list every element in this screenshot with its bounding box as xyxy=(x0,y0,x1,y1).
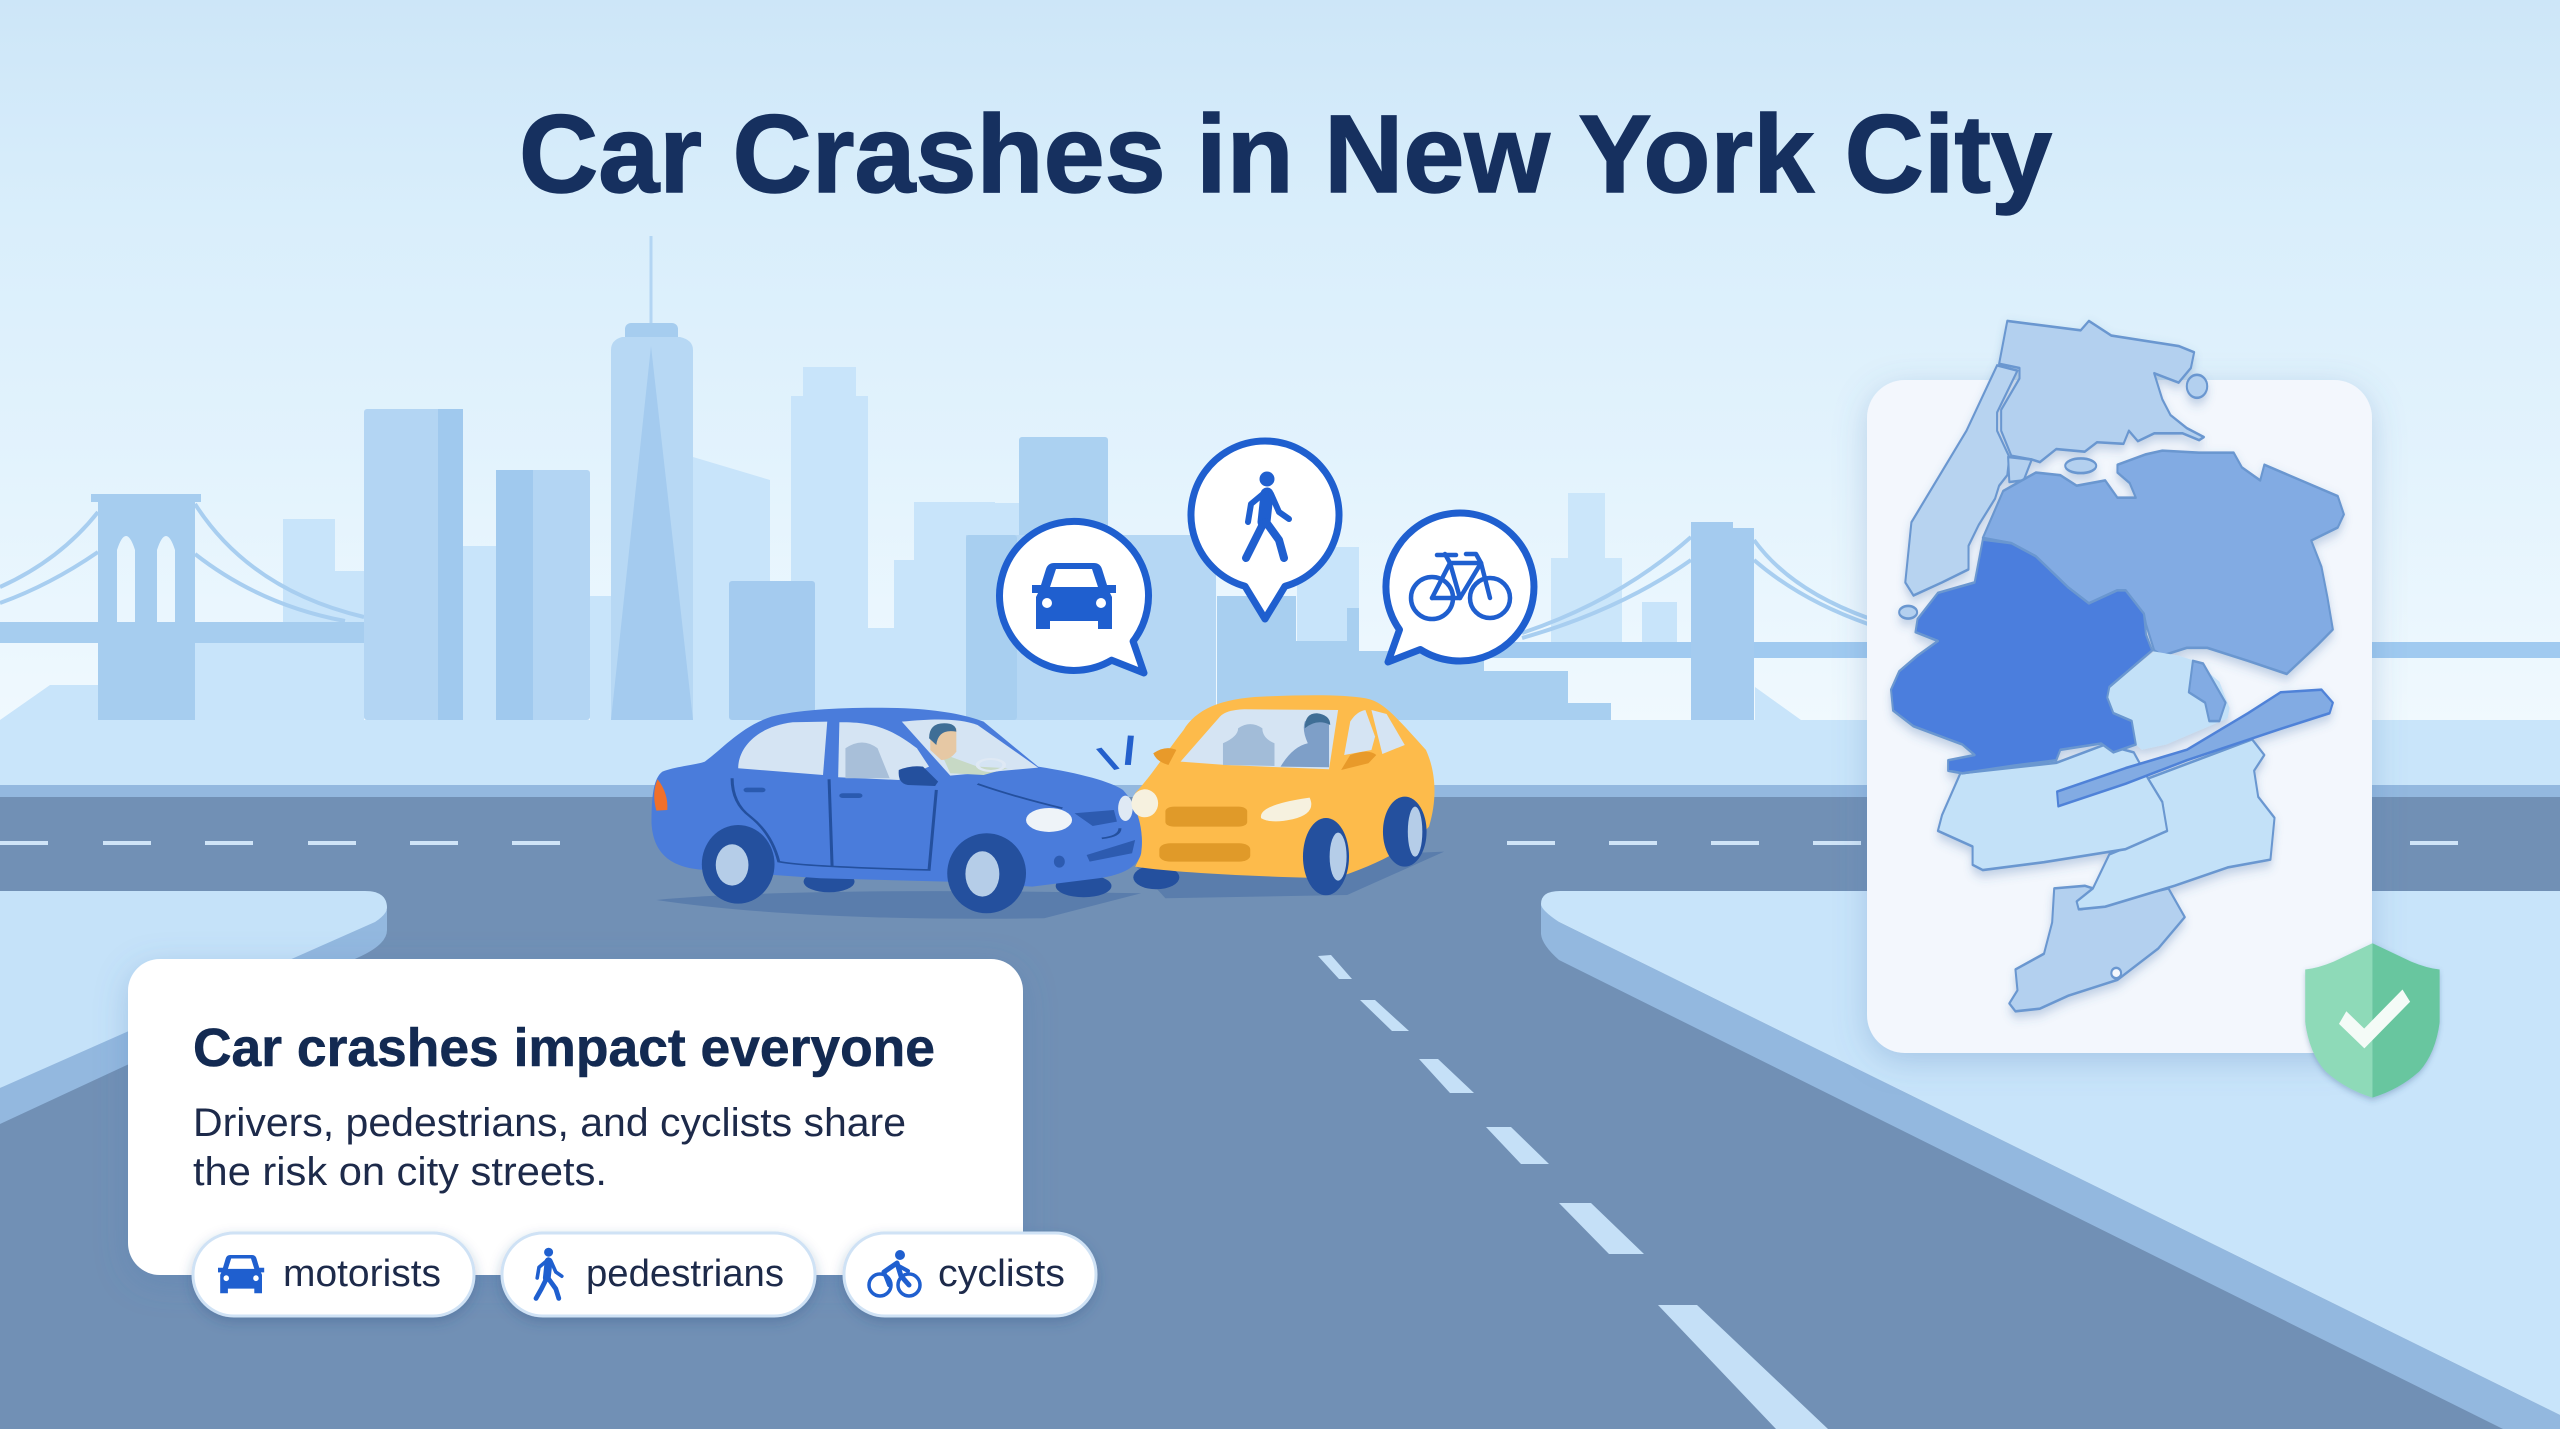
icon: green safety shield xyxy=(2301,938,2444,1105)
pill: motorists: motorists xyxy=(283,1253,441,1295)
skyline with bridges xyxy=(0,236,2560,720)
pill: pedestrians xyxy=(502,1233,815,1316)
text block: callout body xyxy=(193,1101,906,1194)
pill: cyclists xyxy=(844,1233,1096,1316)
map: NYC boroughs xyxy=(1891,321,2344,1011)
icon: bicycle xyxy=(1411,554,1510,619)
map region: Queens xyxy=(1983,451,2344,674)
icon: pedestrian xyxy=(1246,472,1289,558)
panel: borough map card xyxy=(1867,321,2372,1053)
background sky xyxy=(0,0,2560,725)
map region: Jamaica Bay xyxy=(2107,651,2230,750)
map region: Rockaway peninsula xyxy=(2057,690,2333,806)
map region: Manhattan xyxy=(1905,365,2017,595)
road xyxy=(0,785,2560,1429)
map region: southern light blue left xyxy=(1938,745,2167,870)
pill: cyclists: cyclists xyxy=(938,1253,1065,1295)
map region: Bronx xyxy=(1999,321,2204,462)
pill: pedestrians: pedestrians xyxy=(586,1253,784,1295)
car: blue sedan xyxy=(652,708,1158,919)
speech bubble: bicycle xyxy=(1386,513,1534,662)
text block: callout body: the risk on city streets. xyxy=(193,1150,607,1194)
speech bubble: car xyxy=(999,521,1148,673)
title: Car Crashes in New York City xyxy=(519,93,2052,216)
left sidewalk xyxy=(0,891,387,1124)
icon: pedestrian small xyxy=(536,1248,562,1298)
text block: callout body: Drivers, pedestrians, and cyclists share xyxy=(193,1101,906,1145)
icon: impact marks xyxy=(1099,736,1131,769)
right sidewalk xyxy=(1541,891,2560,1429)
ground strip xyxy=(0,720,2560,786)
left bridge cables xyxy=(0,504,364,621)
map region: southern light blue right xyxy=(2077,739,2275,909)
speech bubble: pedestrian xyxy=(1191,441,1339,619)
icon: car xyxy=(1032,563,1116,629)
icon: cyclist xyxy=(869,1250,920,1296)
right bridge cables xyxy=(1522,537,1868,638)
car crash scene xyxy=(652,695,1444,919)
pill: motorists xyxy=(193,1233,474,1316)
map region: Staten Island xyxy=(2009,886,2185,1011)
icon: motorist car xyxy=(218,1255,264,1293)
heading: callout: Car crashes impact everyone xyxy=(193,1018,935,1078)
horizontal lane dashes xyxy=(0,841,2458,845)
car: yellow taxi xyxy=(1132,695,1444,898)
panel: callout card xyxy=(128,959,1096,1316)
map region: Brooklyn xyxy=(1891,540,2152,773)
perspective centre dashes xyxy=(1318,955,1828,1429)
